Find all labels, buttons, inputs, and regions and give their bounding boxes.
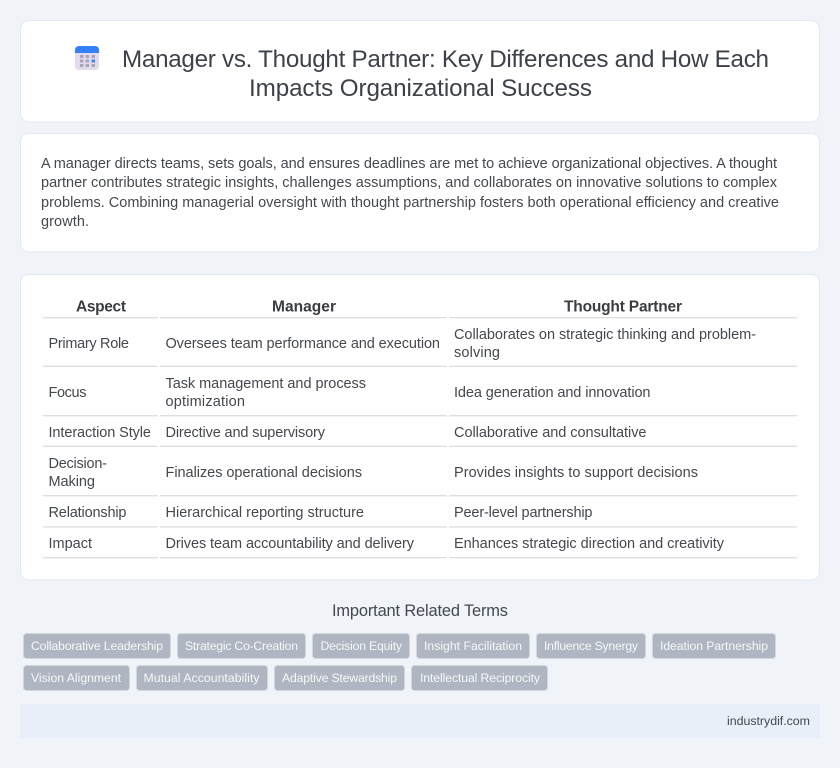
row: primary role: solving xyxy=(454,345,500,361)
row: impact: Enhances strategic direction and creativity xyxy=(454,536,725,552)
header panel xyxy=(20,20,820,122)
related term tags xyxy=(24,634,776,690)
related term tags: Vision Alignment xyxy=(31,671,122,685)
table header: Thought Partner xyxy=(564,298,682,316)
row: impact: Drives team accountability and delivery xyxy=(166,536,415,552)
related term tags: Insight Facilitation xyxy=(424,639,522,653)
intro text: growth. xyxy=(41,214,89,230)
row: focus: Idea generation and innovation xyxy=(454,385,650,401)
related terms heading: Important Related Terms xyxy=(332,602,508,620)
intro text: partner contributes strategic insights, challenges assumptions, and collaborates on innovative solutions to complex xyxy=(41,175,778,191)
row: primary role: Collaborates on strategic thinking and problem- xyxy=(454,327,756,343)
row: primary role: Oversees team performance and execution xyxy=(166,336,440,352)
row: interaction style: Interaction Style xyxy=(48,425,151,441)
row: focus xyxy=(48,376,650,410)
row: interaction style: Directive and supervisory xyxy=(166,425,326,441)
row: relationship xyxy=(48,505,592,521)
related term tags: Influence Synergy xyxy=(544,639,639,653)
intro text xyxy=(41,156,779,230)
row: focus: Focus xyxy=(48,385,86,401)
related term tags: Intellectual Reciprocity xyxy=(420,671,541,685)
row: decision-making: Making xyxy=(48,474,95,490)
row: interaction style: Collaborative and consultative xyxy=(454,425,646,441)
row: interaction style xyxy=(48,425,646,441)
title: Impacts Organizational Success xyxy=(249,75,592,102)
row: impact xyxy=(48,536,725,552)
row: focus: optimization xyxy=(166,394,245,410)
panel: intro paragraph xyxy=(20,134,820,252)
footer bar: industrydif.com xyxy=(727,714,810,728)
row: decision-making: Finalizes operational decisions xyxy=(166,465,362,481)
row: relationship: Relationship xyxy=(48,505,126,521)
row: decision-making: Provides insights to support decisions xyxy=(454,465,698,481)
intro text: problems. Combining managerial oversight with thought partnership fosters both operational efficiency and creative xyxy=(41,195,779,211)
row: primary role xyxy=(48,327,756,361)
related term tags: Ideation Partnership xyxy=(660,639,768,653)
panel: comparison table xyxy=(20,274,820,580)
related term tags: Mutual Accountability xyxy=(144,671,260,685)
title: Manager vs. Thought Partner: Key Differences and How Each xyxy=(122,46,769,73)
row: primary role: Primary Role xyxy=(48,336,129,352)
title xyxy=(122,46,769,102)
row: relationship: Peer-level partnership xyxy=(454,505,592,521)
related term tags: Strategic Co-Creation xyxy=(185,639,298,653)
related term tags: Adaptive Stewardship xyxy=(282,671,397,685)
row: focus: Task management and process xyxy=(166,376,366,392)
icon: calendar xyxy=(75,46,99,70)
table header: Manager xyxy=(272,298,336,316)
intro text: A manager directs teams, sets goals, and ensures deadlines are met to achieve organizational objectives. A thought xyxy=(41,156,777,172)
row: decision-making xyxy=(48,456,698,490)
related term tags: Collaborative Leadership xyxy=(31,639,163,653)
footer bar xyxy=(20,704,820,738)
row: relationship: Hierarchical reporting structure xyxy=(166,505,364,521)
row: decision-making: Decision- xyxy=(48,456,107,472)
table header: Aspect xyxy=(76,298,126,316)
row: impact: Impact xyxy=(48,536,92,552)
related term tags: Decision Equity xyxy=(320,639,403,653)
table header xyxy=(76,298,682,316)
